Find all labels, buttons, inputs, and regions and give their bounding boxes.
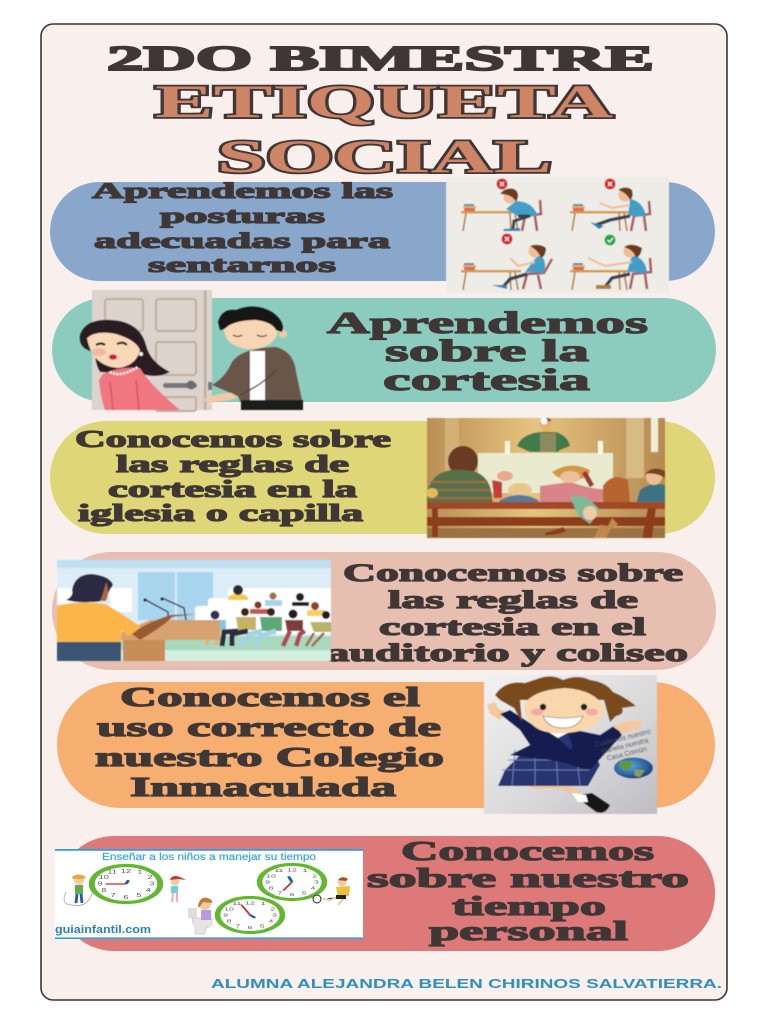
text: cortesia: cortesia <box>383 362 591 397</box>
globe <box>614 758 653 778</box>
priest <box>517 418 570 452</box>
clock 1 <box>92 866 160 902</box>
text: posturas: adecuadas para <box>94 228 390 253</box>
text: colegio: Inmaculada <box>130 772 397 802</box>
small caption: planeta nuestra <box>601 737 649 756</box>
clock 1: 1 <box>137 869 142 875</box>
clock 1: 5 <box>136 892 142 898</box>
girl skipping <box>170 876 186 902</box>
image: church scene <box>426 418 665 538</box>
child skipping rope <box>64 874 92 906</box>
panel: colegio <box>57 675 715 814</box>
clock 1: 8 <box>101 887 106 893</box>
clock 2: 1 <box>303 869 308 873</box>
text: iglesia: cortesia en la <box>108 477 357 503</box>
clock 3: 12 <box>245 901 255 906</box>
clock 3: 11 <box>232 902 242 906</box>
man <box>204 306 303 410</box>
footer: student name: ALUMNA ALEJANDRA BELEN CHIRINOS SALVATIERRA. <box>211 977 722 991</box>
panel background: blue pill <box>50 182 715 281</box>
clock 3: 9 <box>223 913 228 918</box>
panel: auditorio <box>52 552 716 670</box>
text: cortesia: Aprendemos <box>327 305 648 340</box>
posture: top left <box>461 178 541 231</box>
posture: top right <box>570 178 650 231</box>
image: auditorium <box>57 560 331 661</box>
clock 2: 6 <box>290 893 295 898</box>
clock 3: 3 <box>272 913 277 918</box>
clock 2: 9 <box>265 880 270 885</box>
clock 1: 7 <box>110 892 116 898</box>
audience <box>206 585 331 646</box>
bench <box>427 496 665 538</box>
clock 2: 8 <box>269 886 274 891</box>
door <box>92 290 212 411</box>
clock 3: 2 <box>270 907 275 912</box>
text: iglesia: Conocemos sobre <box>75 427 392 453</box>
clock 2: 2 <box>312 874 317 879</box>
clock 3: 6 <box>248 926 253 931</box>
clock 1: 11 <box>107 869 117 875</box>
panel background: yellow pill <box>50 421 715 534</box>
text: colegio <box>95 682 444 802</box>
clock 2: 4 <box>311 886 316 891</box>
text: cortesia <box>327 305 648 397</box>
clock 3: 8 <box>227 919 232 924</box>
panel background: pink pill <box>52 552 716 670</box>
congregation <box>426 446 665 505</box>
posture: bottom right <box>570 234 651 290</box>
text: iglesia: las reglas de <box>116 452 350 478</box>
text: auditorio <box>326 560 688 667</box>
text: iglesia <box>75 427 392 527</box>
clock 3: 4 <box>269 919 274 924</box>
clock 3: 1 <box>261 902 266 906</box>
panel background: teal pill <box>52 298 716 402</box>
clock 3 <box>218 897 282 933</box>
panel: posturas <box>50 177 715 293</box>
clock 1: 6 <box>123 894 129 900</box>
clock 3: 5 <box>260 924 265 929</box>
small caption <box>595 728 655 765</box>
image website: guiainfantil.com <box>55 924 151 936</box>
text: posturas: Aprendemos las <box>92 178 394 203</box>
clock 1: 4 <box>146 887 151 893</box>
clock 1: 10 <box>99 874 109 880</box>
clock 1: 3 <box>149 881 154 887</box>
text: colegio: Conocemos el <box>120 682 421 712</box>
speaker <box>57 574 197 661</box>
text: tiempo: personal <box>429 916 629 946</box>
panel background: red pill <box>57 836 715 951</box>
small caption: Casa Común <box>606 746 648 763</box>
text: tiempo: Conocemos <box>401 836 654 866</box>
small caption: Cuidemos nuestro <box>595 728 651 749</box>
text: posturas <box>92 178 394 277</box>
text: tiempo: sobre nuestro <box>367 863 689 893</box>
girl <box>487 676 642 813</box>
text: auditorio: cortesia en el <box>379 614 646 641</box>
text: posturas: posturas <box>160 203 326 228</box>
podium <box>115 597 220 661</box>
text: auditorio: las reglas de <box>388 587 638 614</box>
clock 2: 10 <box>266 874 276 879</box>
clock 2: 3 <box>314 880 319 885</box>
image: time management <box>55 849 363 939</box>
text: tiempo <box>367 836 689 946</box>
posture: bottom left <box>461 234 552 290</box>
text: tiempo: tiempo <box>452 891 606 921</box>
image: school girl <box>484 675 657 814</box>
text: auditorio: auditorio y coliseo <box>326 640 688 667</box>
child on toilet <box>188 898 212 934</box>
text: colegio: uso correcto de <box>97 712 441 742</box>
text: colegio: nuestro Colegio <box>95 742 444 772</box>
panel background: orange pill <box>57 682 715 808</box>
heading: etiqueta social <box>155 76 613 183</box>
clock 1: 2 <box>147 874 153 880</box>
seats <box>195 588 331 634</box>
panel: tiempo <box>55 836 715 951</box>
clock 3: 10 <box>224 907 234 912</box>
image title: Enseñar a los niños a manejar su tiempo <box>102 852 317 863</box>
text: auditorio: Conocemos sobre <box>343 560 683 587</box>
child with football <box>313 877 350 905</box>
clock 1: 12 <box>121 868 131 874</box>
clock 3: 7 <box>235 924 240 929</box>
text: iglesia: iglesia o capilla <box>78 501 363 527</box>
clock 2: 7 <box>277 891 282 896</box>
heading: etiqueta social: ETIQUETA <box>155 76 613 128</box>
panel: iglesia <box>50 418 715 538</box>
clock 2: 12 <box>287 868 297 873</box>
clock 2 <box>260 864 324 900</box>
clock 1: 9 <box>98 881 103 887</box>
clock 2: 5 <box>302 891 307 896</box>
image: sitting postures <box>446 177 669 293</box>
panel: cortesia <box>52 290 716 411</box>
text: posturas: sentarnos <box>148 252 337 277</box>
altar and candles <box>478 441 613 493</box>
heading: 2do bimestre: 2DO BIMESTRE <box>107 39 654 78</box>
woman <box>80 320 180 410</box>
image: door courtesy <box>80 290 303 411</box>
clock 2: 11 <box>274 869 284 873</box>
text: cortesia: sobre la <box>385 333 590 368</box>
heading: etiqueta social: SOCIAL <box>217 131 552 183</box>
